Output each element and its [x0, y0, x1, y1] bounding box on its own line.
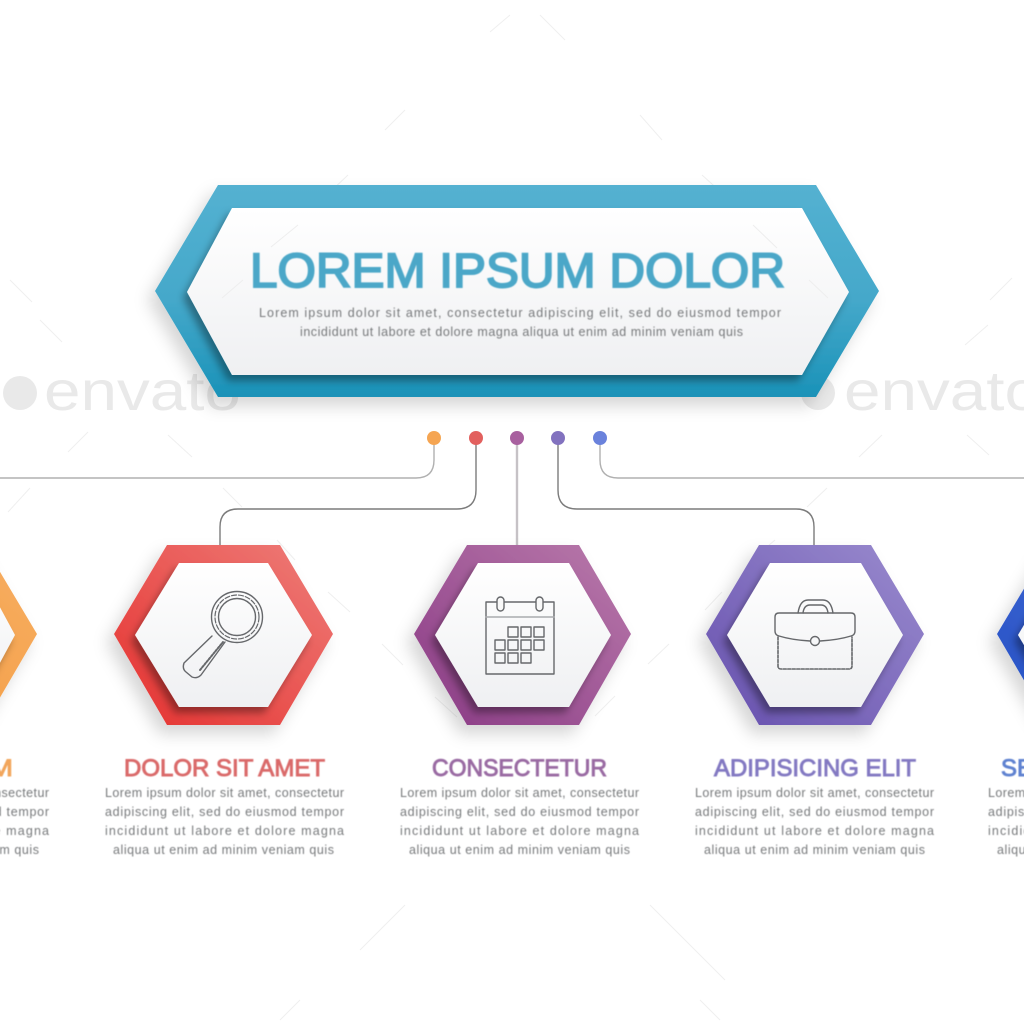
banner inner panel [187, 208, 849, 375]
text: adipisicing elit: adipiscing elit, sed do eiusmod tempor [695, 805, 934, 819]
dot: red [469, 431, 483, 445]
banner title: LOREM IPSUM DOLOR [250, 245, 785, 298]
connector: red [220, 438, 476, 545]
watermark: right: envato [844, 359, 1024, 422]
icon: magnifying glass [183, 592, 262, 678]
connector: purple [516, 438, 518, 545]
icon: calendar [486, 597, 554, 674]
column: adipisicing elit [695, 755, 934, 857]
column: dolor sit amet [105, 755, 344, 857]
column: consectetur [400, 755, 639, 857]
hexagon: blue [997, 545, 1024, 725]
heading: adipisicing elit: ADIPISICING ELIT [714, 755, 916, 782]
connector: violet [558, 438, 814, 545]
connector: blue [600, 438, 1024, 478]
text: orange [0, 786, 49, 857]
dot: purple [510, 431, 524, 445]
hexagon: red with magnifier [114, 545, 333, 725]
column: blue (cropped) [988, 755, 1024, 857]
text: dolor sit amet: aliqua ut enim ad minim veniam quis [113, 843, 334, 857]
icon: briefcase [775, 600, 855, 669]
connector lines [0, 438, 1024, 545]
heading: consectetur: CONSECTETUR [432, 755, 607, 782]
dot: violet [551, 431, 565, 445]
text: dolor sit amet: Lorem ipsum dolor sit amet, consectetur [105, 786, 344, 800]
banner text [259, 306, 781, 339]
dot: orange [427, 431, 441, 445]
hexagon: violet with briefcase [706, 545, 924, 725]
faint lines over banner [222, 225, 828, 298]
dots [427, 431, 607, 445]
text: consectetur [400, 786, 639, 857]
hexagon: orange [0, 572, 37, 707]
heading: dolor sit amet: DOLOR SIT AMET [124, 755, 325, 782]
text: dolor sit amet: adipiscing elit, sed do eiusmod tempor [105, 805, 344, 819]
text: dolor sit amet [105, 786, 344, 857]
column: orange (cropped) [0, 755, 49, 857]
banner text: Lorem ipsum dolor sit amet, consectetur adipiscing elit, sed do eiusmod tempor [259, 306, 781, 320]
dot: blue [593, 431, 607, 445]
connector: orange [0, 438, 434, 478]
watermark: left: envato [44, 359, 241, 422]
text: adipisicing elit: aliqua ut enim ad minim veniam quis [704, 843, 925, 857]
header banner [155, 185, 879, 397]
text: adipisicing elit [695, 786, 934, 857]
text: dolor sit amet: incididunt ut labore et dolore magna [105, 824, 344, 838]
text: consectetur: aliqua ut enim ad minim veniam quis [409, 843, 630, 857]
hexagon: purple with calendar [414, 545, 631, 725]
text: adipisicing elit: Lorem ipsum dolor sit amet, consectetur [695, 786, 934, 800]
banner text: incididunt ut labore et dolore magna aliqua ut enim ad minim veniam quis [300, 325, 743, 339]
text: blue [988, 786, 1024, 857]
text: consectetur: adipiscing elit, sed do eiusmod tempor [400, 805, 639, 819]
text: consectetur: Lorem ipsum dolor sit amet, consectetur [400, 786, 639, 800]
text: consectetur: incididunt ut labore et dolore magna [400, 824, 639, 838]
text: adipisicing elit: incididunt ut labore et dolore magna [695, 824, 934, 838]
banner frame [155, 185, 879, 397]
